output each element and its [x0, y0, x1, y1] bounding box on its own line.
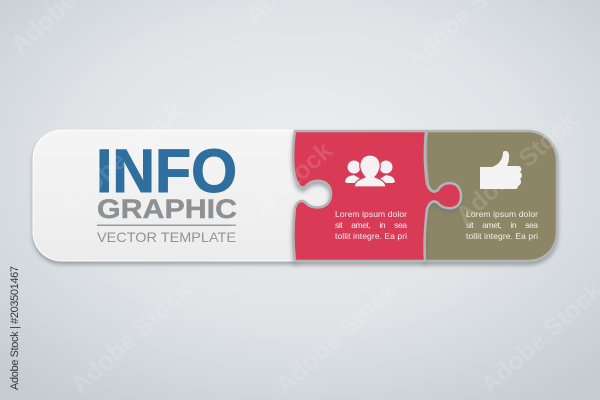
heading: INFO: INFO	[96, 137, 237, 205]
panel: olive piece	[424, 131, 557, 261]
text block: olive: tollit integre. Ea pri	[466, 231, 538, 241]
text block: red: sit amet, in sea	[335, 220, 407, 230]
icon: thumbs up	[480, 151, 522, 189]
watermark overlay: Adobe Stock	[205, 136, 338, 259]
text block: olive	[466, 209, 538, 241]
subheading: vector template: VECTOR TEMPLATE	[97, 229, 236, 245]
watermark overlay: Adobe Stock	[450, 106, 583, 229]
divider rule	[97, 224, 236, 226]
watermark overlay: Adobe Stock	[55, 96, 188, 219]
side credit: Adobe Stock | #203501467	[9, 266, 21, 390]
text block: olive: Lorem ipsum dolor	[466, 209, 538, 219]
watermark overlay: Adobe Stock	[270, 276, 403, 399]
text block: red	[335, 209, 407, 241]
panel: title piece	[33, 130, 331, 261]
text block: olive: sit amet, in sea	[466, 220, 538, 230]
text block: red: Lorem ipsum dolor	[335, 209, 407, 219]
watermark overlay: Adobe Stock	[65, 276, 198, 399]
heading: GRAPHIC: GRAPHIC	[97, 194, 237, 224]
icon: group of people	[345, 155, 395, 187]
text block: red: tollit integre. Ea pri	[335, 231, 407, 241]
panel: red piece	[293, 131, 461, 261]
